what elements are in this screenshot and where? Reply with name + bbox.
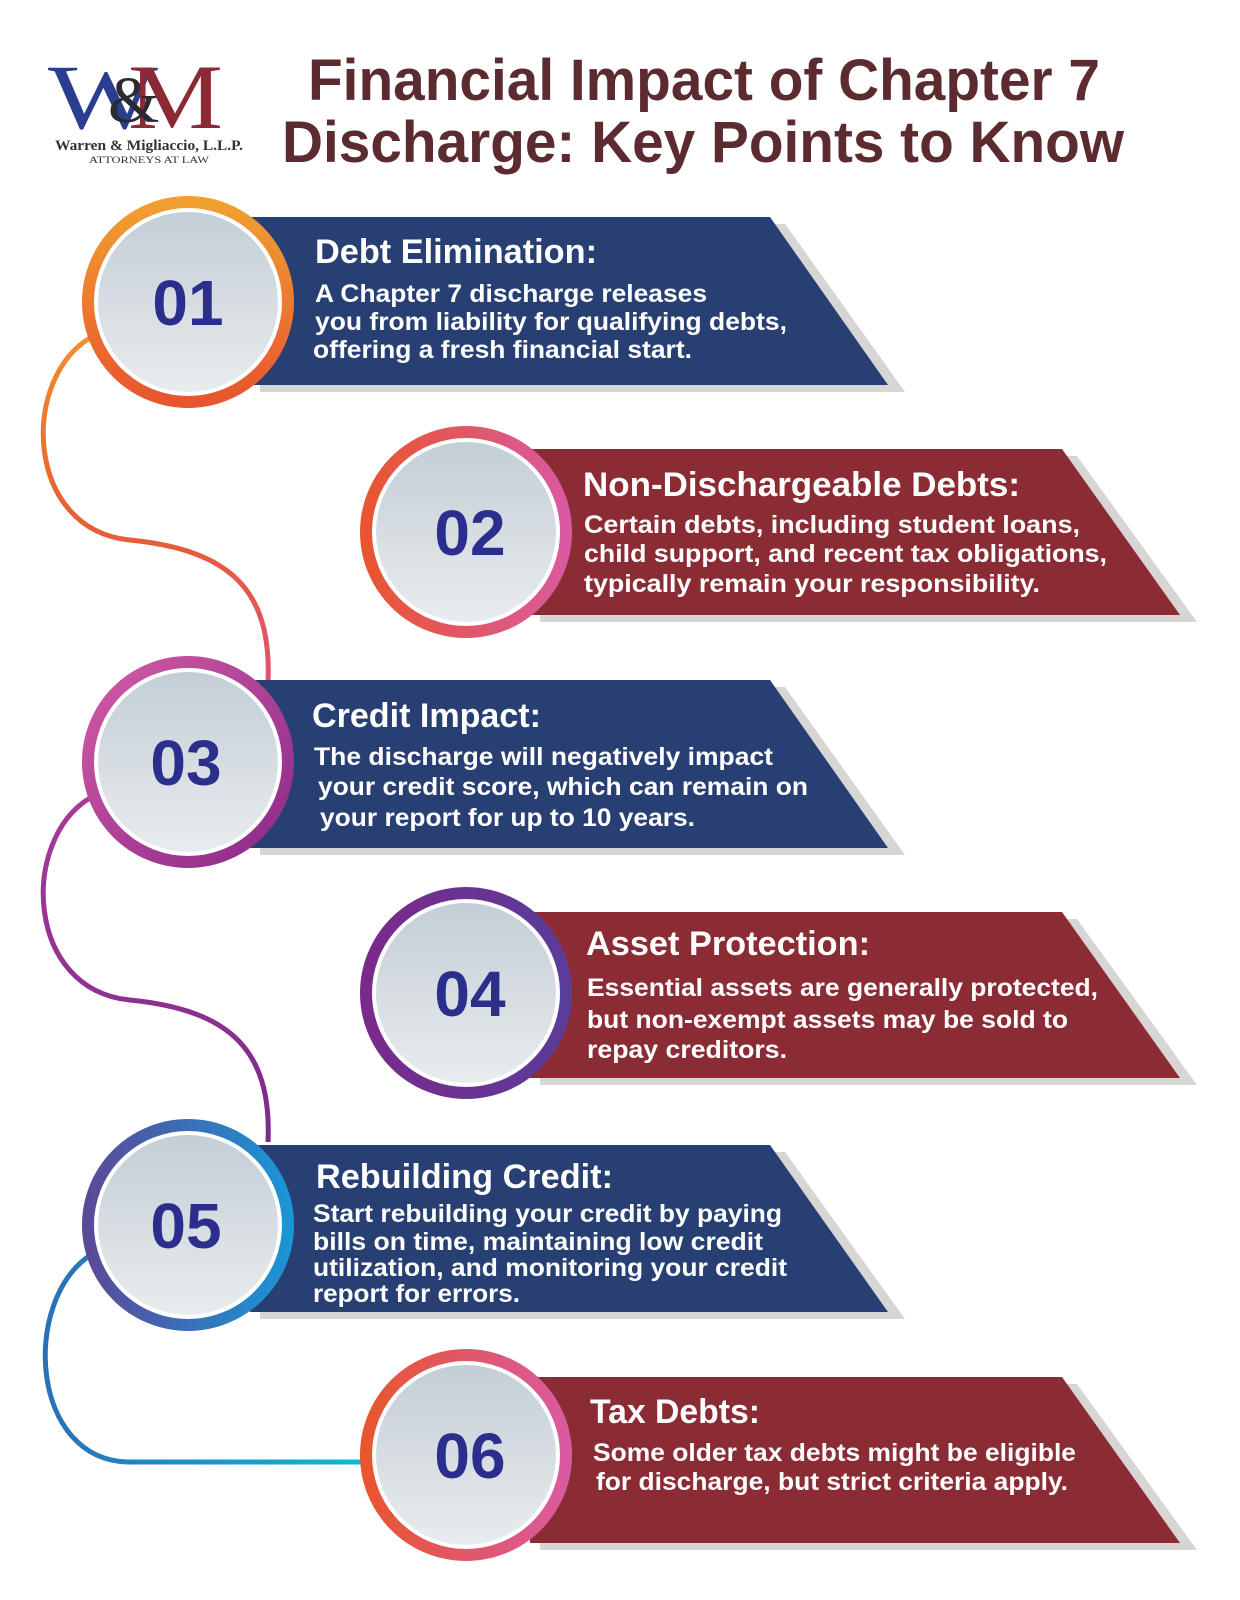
panel 5: rebuilding credit [250,1145,905,1319]
body 1: A Chapter 7 discharge releases [315,280,707,308]
panel 1: debt elimination [250,217,905,392]
body 5: Start rebuilding your credit by paying [313,1200,782,1228]
body 3: The discharge will negatively impact [314,743,774,771]
heading 5: Rebuilding Credit: [316,1158,613,1196]
circle 04 [366,893,566,1093]
circle 01 [88,202,288,402]
logo: & [108,64,159,137]
circle 03 [88,662,288,862]
body 1: you from liability for qualifying debts, [315,308,787,336]
connector: 01 to 03 [43,338,268,682]
logo: W [48,46,158,148]
body 3 [314,743,808,832]
body 4: but non-exempt assets may be sold to [587,1006,1068,1034]
circle 06: 06 [434,1420,506,1492]
title: Discharge: Key Points to Know [282,110,1125,175]
body 1 [313,280,787,364]
heading 4: Asset Protection: [586,925,870,963]
circle 06 [366,1355,566,1555]
panel 3: credit impact [250,680,905,855]
body 3: your credit score, which can remain on [318,773,808,801]
connector: 03 to 05 [43,798,268,1142]
body 6: for discharge, but strict criteria apply. [596,1468,1068,1496]
body 6 [593,1439,1076,1496]
body 4: Essential assets are generally protected, [587,974,1098,1002]
body 5: bills on time, maintaining low credit [313,1228,764,1256]
circle 02 [366,432,566,632]
body 5: utilization, and monitoring your credit [313,1254,788,1282]
body 2: typically remain your responsibility. [584,570,1040,598]
logo: M [128,46,223,148]
circle 02: 02 [434,497,506,569]
heading 6: Tax Debts: [590,1393,760,1431]
body 2: child support, and recent tax obligations, [584,540,1107,568]
panel 6: tax debts [530,1377,1197,1550]
circle 03: 03 [150,727,222,799]
body 5 [313,1200,788,1308]
body 4: repay creditors. [587,1036,787,1064]
circle 05 [88,1125,288,1325]
logo [48,46,243,166]
circle 05: 05 [150,1190,222,1262]
body 4 [587,974,1098,1064]
title [282,48,1125,175]
body 6: Some older tax debts might be eligible [593,1439,1076,1467]
logo: ATTORNEYS AT LAW [89,156,209,166]
body 2 [584,511,1107,598]
circle 04: 04 [434,958,506,1030]
body 1: offering a fresh financial start. [313,336,692,364]
body 5: report for errors. [313,1280,520,1308]
panel 4: asset protection [530,912,1197,1085]
panel 2: non-dischargeable debts [530,449,1197,622]
body 2: Certain debts, including student loans, [584,511,1080,539]
title: Financial Impact of Chapter 7 [308,48,1100,113]
heading 3: Credit Impact: [312,697,541,735]
connector: 05 to 06 [45,1254,365,1462]
circle 01: 01 [152,267,224,339]
heading 2: Non-Dischargeable Debts: [583,466,1020,504]
logo: Warren & Migliaccio, L.L.P. [55,138,243,154]
heading 1: Debt Elimination: [315,233,597,271]
body 3: your report for up to 10 years. [320,804,695,832]
